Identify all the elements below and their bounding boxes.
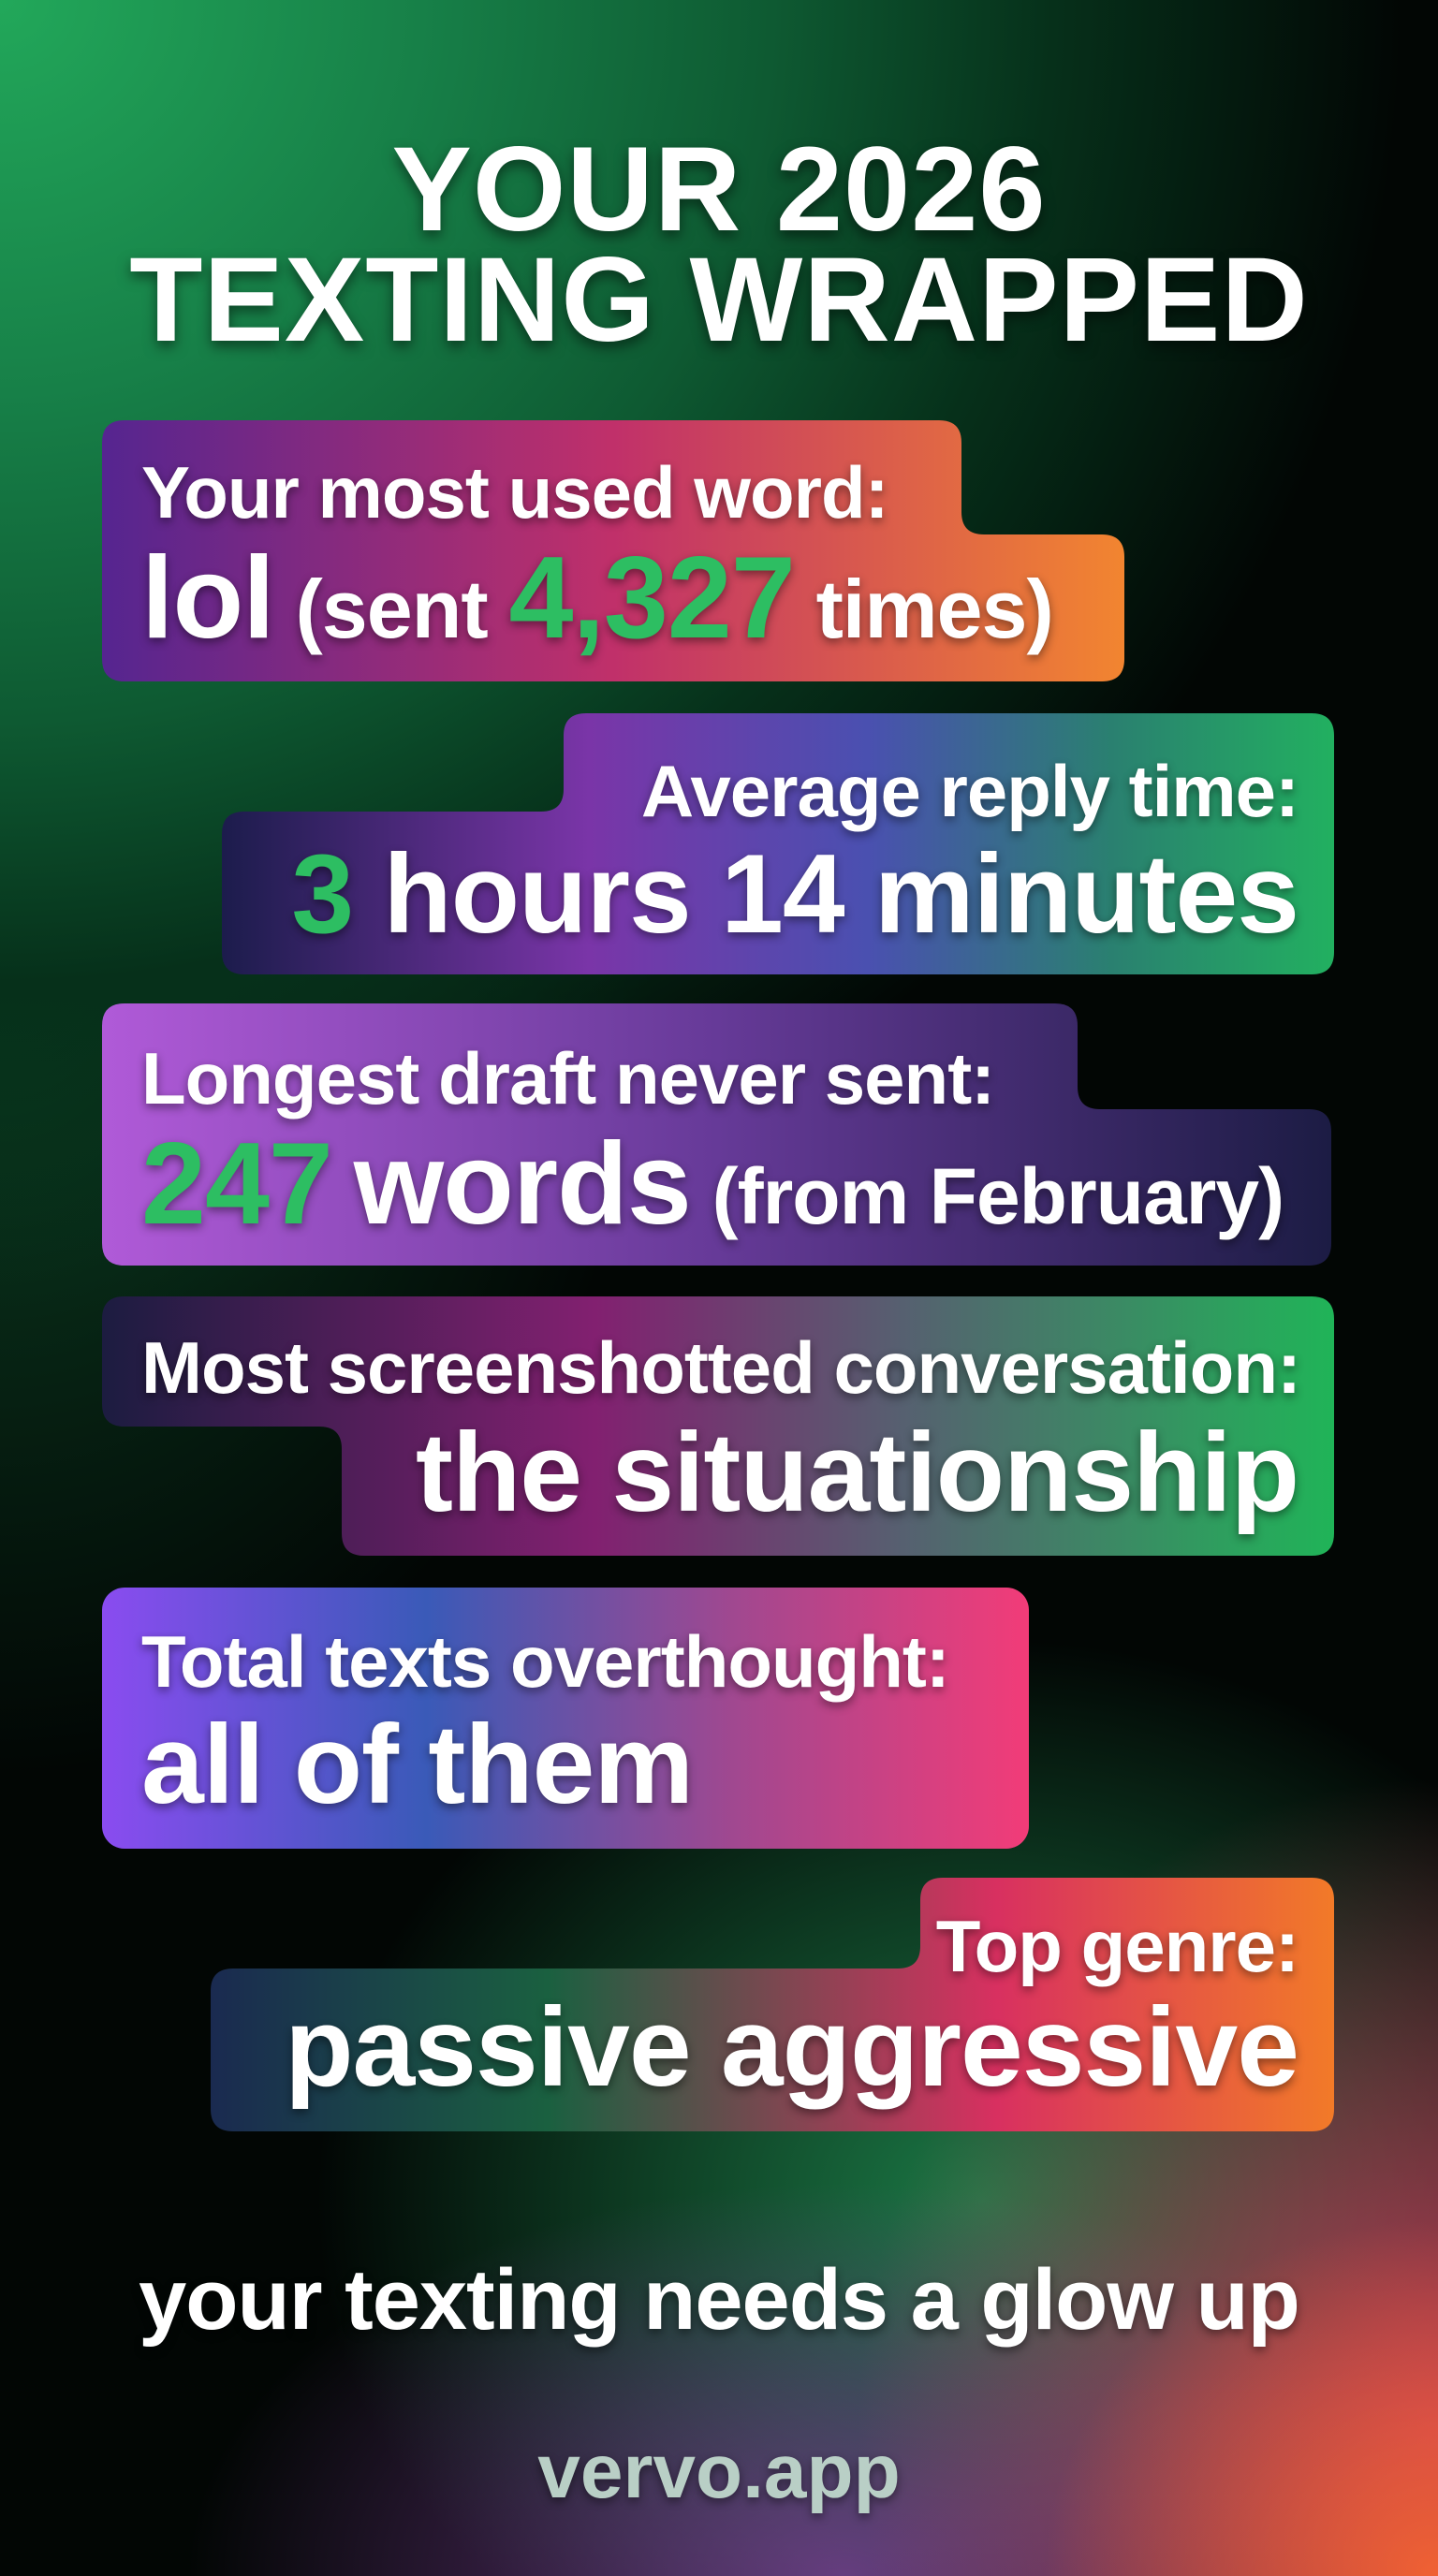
value: passive aggressive [285,1984,1299,2110]
value: 3 hours 14 minutes [291,831,1299,957]
value: the situationship [416,1410,1299,1535]
card: total texts overthought [102,1588,1029,1849]
label: Average reply time: [641,750,1299,832]
card: longest draft [102,1003,1331,1266]
card: average reply time [222,713,1334,974]
value: 247 words (from February) [141,1120,1284,1249]
title: TEXTING WRAPPED [129,233,1309,367]
title [125,123,1309,367]
label: Most screenshotted conversation: [141,1326,1300,1409]
card: most used word [102,420,1124,681]
card: most screenshotted [102,1296,1334,1556]
card: top genre [211,1878,1334,2131]
label: Total texts overthought: [141,1620,949,1703]
tagline: your texting needs a glow up [139,2252,1299,2348]
brand url: vervo.app [537,2429,901,2514]
label: Your most used word: [141,451,888,534]
value: all of them [141,1702,693,1827]
label: Longest draft never sent: [141,1037,994,1120]
label: Top genre: [936,1905,1299,1987]
title: YOUR 2026 [391,123,1047,256]
value: lol (sent 4,327 times) [141,534,1053,663]
